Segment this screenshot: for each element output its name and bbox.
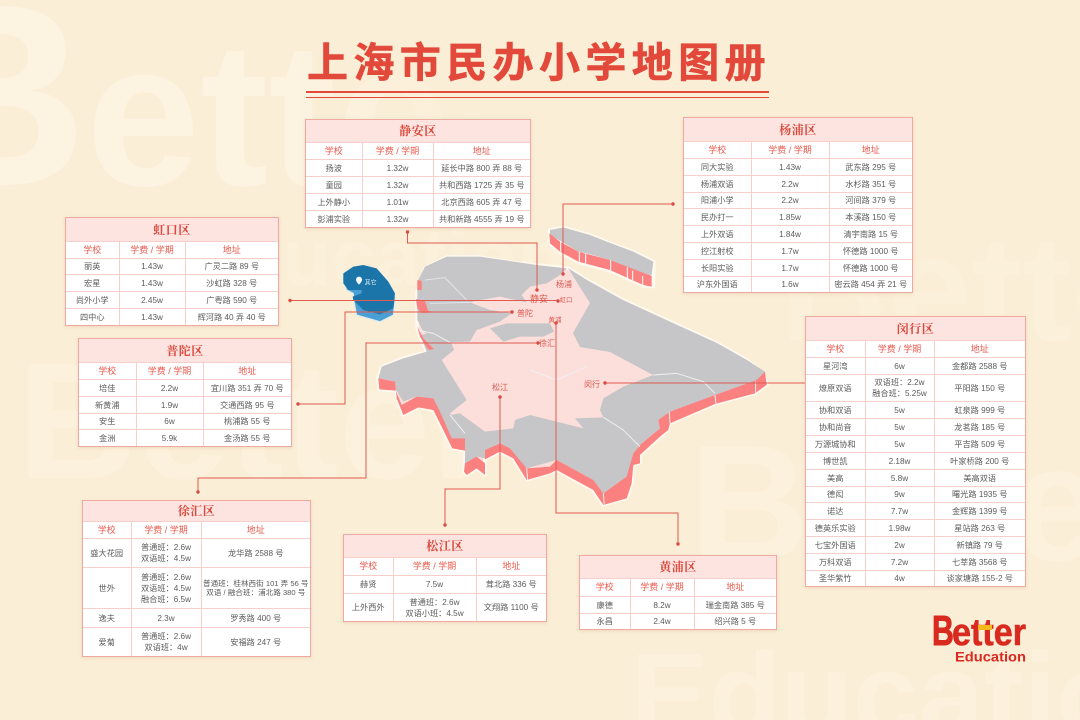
table: 七宝外国语 [815, 540, 856, 550]
table: 金辉路 1399 号 [952, 506, 1008, 516]
heading: 黄浦区 [659, 560, 697, 574]
map districts grey: centre [490, 323, 554, 342]
label: other: 其它 [365, 278, 377, 286]
heading: 静安区 [399, 124, 437, 138]
table: 怀德路 1000 号 [843, 246, 898, 256]
table: 2w [894, 540, 905, 550]
table: 永昌 [597, 617, 613, 626]
table: 5w [894, 406, 905, 414]
table: 普通班：2.6w [141, 572, 191, 582]
table: 普通班：2.6w [141, 632, 191, 641]
panel: 闵行区 [805, 316, 1026, 587]
heading: 闵行区 [897, 322, 934, 336]
table: 双语小班：4.5w [405, 609, 464, 618]
table: 虹泉路 999 号 [954, 406, 1005, 414]
map district labels: 徐汇 [539, 338, 555, 348]
table [83, 522, 310, 656]
table [684, 142, 912, 292]
table: 2.2w [781, 196, 799, 205]
table: 8.2w [653, 600, 671, 610]
table: 安福路 247 号 [230, 638, 281, 647]
table: 普通班：2.6w [409, 598, 460, 607]
table: 金洲 [99, 434, 115, 443]
table [306, 143, 530, 227]
table: 融合班：6.5w [141, 594, 191, 604]
table: 2.2w [781, 180, 799, 188]
table: 辉河路 40 弄 40 号 [198, 313, 266, 322]
table: 6w [164, 417, 175, 426]
table: 7.2w [891, 558, 908, 566]
title: 上海市民办小学地图册 [307, 40, 771, 86]
map area: other (blue) [343, 265, 395, 322]
table: 学费 / 学期 [768, 145, 812, 155]
table: 沪东外国语 [697, 280, 738, 289]
heading: 松江区 [426, 539, 464, 553]
table: 6w [894, 362, 905, 370]
table: 学校 [596, 582, 614, 592]
table: 新镇路 79 号 [957, 540, 1003, 550]
panel: 普陀区 [78, 338, 292, 447]
table: 交通西路 95 号 [220, 400, 275, 410]
table: 燎原双语 [819, 384, 852, 392]
table: 双语班：2.2w [874, 378, 925, 387]
map island: Chongming [549, 227, 654, 287]
table: 河间路 379 号 [845, 196, 896, 205]
table: 双语 / 融合班：浦北路 380 号 [206, 588, 305, 597]
table: 1.43w [141, 262, 163, 271]
table: 清宇南路 15 号 [843, 230, 898, 238]
table: 长阳实验 [701, 264, 734, 272]
table: 星站路 263 号 [954, 524, 1005, 532]
table: 七莘路 3568 号 [952, 558, 1008, 566]
table: 共和新路 4555 弄 19 号 [439, 215, 525, 224]
table: 学校 [359, 561, 377, 571]
panel: 杨浦区 [683, 117, 913, 293]
table: 地址 [862, 145, 880, 155]
table: 广粤路 590 号 [206, 296, 257, 304]
table: 彭浦实验 [317, 215, 350, 224]
table: 1.43w [141, 313, 163, 322]
heading [79, 339, 291, 363]
table: 安生 [99, 417, 115, 426]
table: 同大实验 [701, 162, 734, 172]
table: 1.7w [781, 264, 799, 272]
pin icon [356, 277, 362, 285]
table: 博世凯 [823, 456, 848, 466]
table: 培佳 [99, 384, 115, 392]
table: 1.32w [387, 215, 408, 224]
title underline [306, 91, 769, 98]
table: 9w [894, 490, 905, 499]
table: 地址 [238, 366, 256, 376]
table: 控江射校 [701, 246, 734, 256]
table: 学校 [98, 366, 116, 376]
table: 桃浦路 55 号 [224, 417, 270, 426]
table: 德英乐实验 [815, 524, 856, 532]
table: 扬波 [326, 164, 342, 172]
table: 怀德路 1000 号 [843, 264, 898, 272]
map base silhouette [378, 257, 767, 505]
table: 星河湾 [823, 362, 848, 370]
logo: Better Education: etter [952, 612, 1026, 654]
table: 双语班：4w [144, 643, 188, 652]
table: 学校 [325, 146, 343, 156]
map district labels: 杨浦 [556, 279, 572, 289]
table: 双语班：4.5w [141, 554, 191, 563]
table: 世外 [99, 584, 115, 592]
table: 新黄浦 [95, 400, 120, 410]
table: 4w [894, 574, 905, 583]
table: 龙华路 2588 号 [228, 548, 284, 558]
table: 平阳路 150 号 [954, 384, 1005, 392]
table [580, 579, 776, 629]
table: 康德 [597, 600, 613, 610]
background watermark: etter [86, 0, 530, 229]
table: 1.84w [779, 230, 801, 238]
table: 上外西外 [352, 603, 385, 612]
table: 延长中路 800 弄 88 号 [441, 164, 522, 172]
heading [684, 118, 912, 142]
table: 1.9w [161, 400, 178, 410]
logo: Better Education: Education [955, 648, 1026, 664]
table: 万源城协和 [815, 440, 856, 448]
table: 万科双语 [819, 558, 852, 566]
heading: 虹口区 [153, 223, 191, 237]
table: 普通班：桂林西街 101 弄 56 号 [203, 579, 308, 588]
heading [806, 317, 1025, 341]
table: 水杉路 351 号 [845, 180, 896, 188]
table: 北京西路 605 弄 47 号 [441, 198, 522, 206]
table: 学费 / 学期 [144, 525, 188, 535]
heading: 杨浦区 [779, 123, 817, 137]
table: 童园 [326, 180, 342, 190]
map district labels: 闵行 [584, 379, 600, 389]
table: 叶家桥路 200 号 [950, 456, 1009, 466]
table: 武东路 295 号 [845, 162, 896, 172]
map district labels: 普陀 [517, 308, 533, 318]
table: 2.3w [157, 614, 175, 622]
panel: 松江区 [343, 534, 547, 622]
table: 5w [894, 440, 905, 448]
table: 德闳 [827, 490, 843, 499]
table: 本溪路 150 号 [845, 212, 896, 222]
table: 杨浦双语 [701, 180, 734, 188]
panel: 静安区 [305, 119, 531, 228]
table: 圣华紫竹 [819, 574, 852, 583]
table: 宏星 [84, 278, 100, 288]
map districts grey: north [417, 257, 567, 342]
table: 学费 / 学期 [148, 366, 191, 376]
table: 谈家塘路 155-2 号 [947, 574, 1013, 583]
table: 1.32w [387, 180, 408, 190]
table: 2.18w [889, 456, 910, 466]
heading [66, 218, 278, 242]
table: 罗秀路 400 号 [230, 614, 281, 622]
table: 地址 [223, 245, 241, 255]
connector dots [196, 202, 680, 546]
table: 共和西路 1725 弄 35 号 [439, 180, 525, 190]
table: 5.8w [891, 474, 908, 482]
heading [580, 556, 776, 579]
table: 地址 [726, 582, 744, 592]
table: 文翔路 1100 号 [484, 603, 539, 612]
table: 1.32w [387, 164, 408, 172]
table: 诺达 [827, 506, 843, 516]
table: 上外静小 [317, 198, 350, 206]
table [79, 363, 291, 446]
table [344, 558, 546, 621]
logo: Better Education: B [932, 608, 954, 654]
table: 丽英 [84, 262, 100, 271]
table: 协和尚音 [819, 422, 852, 432]
table: 1.01w [387, 198, 408, 206]
map district labels [492, 279, 600, 392]
table: 2.2w [161, 384, 178, 392]
map district labels: 虹口 [560, 295, 572, 304]
table: 学费 / 学期 [130, 245, 174, 255]
table: 协和双语 [819, 406, 852, 414]
background watermark: Better [18, 329, 495, 513]
table: 盛大花园 [90, 548, 123, 558]
table: 赫贤 [360, 580, 376, 589]
table: 美高双语 [963, 474, 996, 482]
logo: Better Education [932, 608, 1026, 664]
table: 融合班：5.25w [872, 389, 927, 398]
table: 龙茗路 185 号 [954, 422, 1005, 432]
table: 1.7w [781, 246, 799, 256]
table: 尚外小学 [76, 296, 109, 304]
table: 地址 [247, 525, 265, 535]
table: 1.6w [781, 280, 799, 289]
map district labels: 松江 [492, 382, 508, 392]
heading: 普陀区 [166, 344, 204, 358]
table: 逸夫 [99, 614, 115, 622]
map district labels: 黄浦 [548, 315, 562, 324]
table: 学校 [98, 525, 116, 535]
table: 瑞金南路 385 号 [706, 600, 765, 610]
table: 美高 [827, 474, 843, 482]
table: 平吉路 509 号 [954, 440, 1005, 448]
table: 密云路 454 弄 21 号 [834, 280, 907, 289]
table [66, 242, 278, 325]
table: 地址 [971, 344, 989, 354]
table: 爱菊 [99, 638, 115, 647]
table: 学校 [83, 245, 101, 255]
table: 广灵二路 89 号 [204, 262, 259, 271]
table: 普通班：2.6w [141, 543, 191, 552]
table: 学费 / 学期 [640, 582, 684, 592]
panel: 徐汇区 [82, 500, 311, 657]
panel: 虹口区 [65, 217, 279, 326]
table: 学费 / 学期 [878, 344, 921, 354]
map districts: west, south-east and coast sides [378, 268, 767, 505]
table: 学费 / 学期 [376, 146, 419, 156]
table: 7.7w [891, 506, 908, 516]
map district labels: 静安 [530, 293, 548, 304]
table: 宜川路 351 弄 70 号 [211, 384, 284, 392]
table: 民办打一 [701, 212, 734, 222]
table: 绍兴路 5 号 [714, 617, 756, 626]
table: 沙虹路 328 号 [206, 278, 257, 288]
table: 2.45w [141, 296, 163, 304]
table: 学校 [826, 344, 844, 354]
table: 学校 [708, 145, 726, 155]
background watermark: Education [180, 213, 567, 302]
table: 茸北路 336 号 [486, 580, 537, 589]
heading [344, 535, 546, 558]
table: 地址 [502, 561, 520, 571]
heading: 徐汇区 [178, 504, 215, 518]
table: 金汤路 55 号 [224, 434, 270, 443]
table: 曙光路 1935 号 [952, 490, 1008, 499]
table: 1.85w [779, 212, 801, 222]
heading [83, 501, 310, 522]
panel: 黄浦区 [579, 555, 777, 630]
table: 阳浦小学 [701, 196, 734, 205]
table: 金都路 2588 号 [952, 362, 1008, 370]
table: 双语班：4.5w [141, 584, 191, 592]
table: 地址 [473, 146, 491, 156]
table: 学费 / 学期 [413, 561, 456, 571]
table: 7.5w [426, 580, 443, 589]
table: 5w [894, 422, 905, 432]
heading [306, 120, 530, 143]
map left coast sides [416, 278, 470, 350]
table: 四中心 [80, 313, 105, 322]
table: 1.43w [141, 278, 163, 288]
connector lines [198, 204, 806, 544]
table: 1.43w [779, 162, 801, 172]
table: 2.4w [653, 617, 671, 626]
table: 上外双语 [701, 230, 734, 238]
table [806, 341, 1025, 586]
table: 5.9k [162, 434, 177, 443]
table: 1.98w [889, 524, 910, 532]
